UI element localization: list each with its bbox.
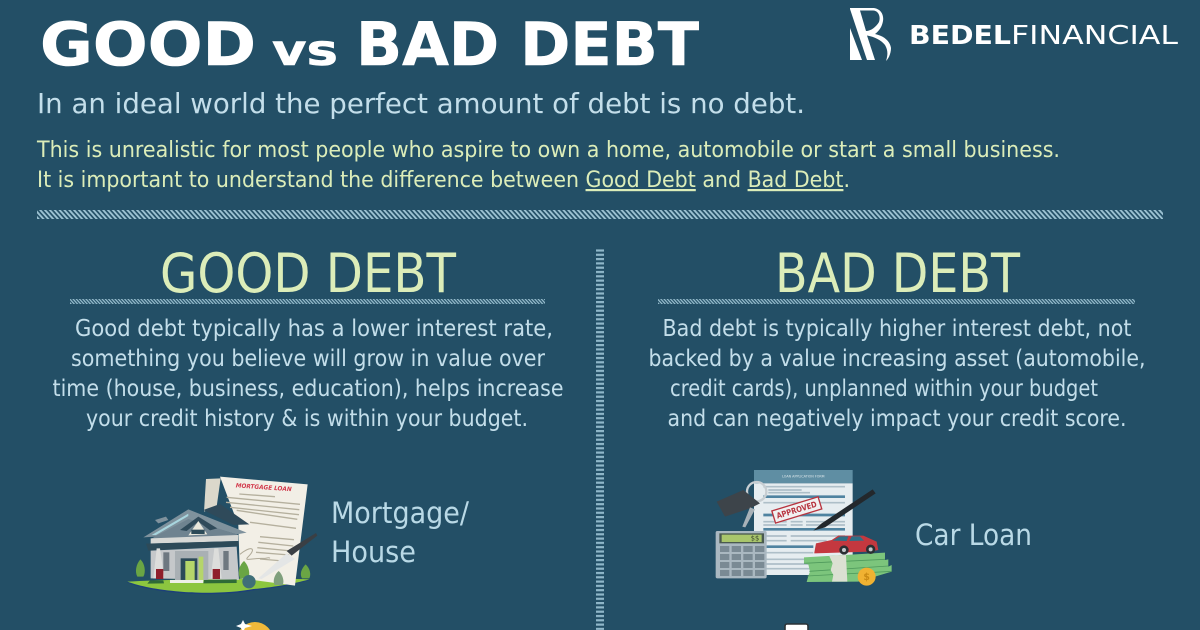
bad debt description: backed by a value increasing asset (automobile,: [648, 346, 1146, 372]
heading: bad debt: BAD DEBT: [775, 242, 1021, 305]
bad debt description: Bad debt is typically higher interest debt, not: [662, 316, 1132, 342]
icon: car loan: $$: [751, 535, 759, 543]
title: vs: [272, 26, 338, 76]
heading: good debt: GOOD DEBT: [160, 242, 457, 305]
intro text: This is unrealistic for most people who aspire to own a home, automobile or start a small business.: [36, 138, 1060, 163]
icon: car loan: LOAN APPLICATION FORM: [782, 474, 825, 478]
good debt description: [52, 316, 564, 432]
panel: good debt: [52, 242, 564, 630]
label: mortgage/house: Mortgage/: [331, 496, 469, 530]
icon: mortgage house: MORTGAGE LOAN: [236, 482, 292, 493]
subtitle: In an ideal world the perfect amount of debt is no debt.: [37, 87, 805, 120]
good debt description: time (house, business, education), helps increase: [52, 376, 564, 402]
title: [40, 10, 699, 80]
icon: car loan: [716, 470, 892, 586]
logo: Bedel Financial: [850, 8, 1179, 61]
label: mortgage/house: House: [331, 535, 416, 569]
title: GOOD: [40, 10, 256, 80]
label: car loan: Car Loan: [915, 518, 1032, 552]
icon: phone top: [785, 624, 808, 630]
icon: coin: [236, 620, 273, 630]
bad debt description: credit cards), unplanned within your budget: [670, 376, 1098, 402]
panel: bad debt: [648, 242, 1146, 630]
logo: Bedel Financial: BEDEL: [909, 21, 1011, 51]
logo: Bedel Financial: FINANCIAL: [1011, 21, 1179, 51]
bad debt description: and can negatively impact your credit score.: [668, 406, 1126, 432]
icon: car loan: $: [863, 572, 870, 583]
bad debt description: [648, 316, 1146, 432]
good debt description: something you believe will grow in value over: [71, 346, 545, 372]
intro text: It is important to understand the difference between Good Debt and Bad Debt.: [37, 168, 850, 193]
title: BAD DEBT: [356, 10, 699, 80]
good debt description: your credit history & is within your budget.: [86, 406, 528, 432]
icon: mortgage house: [127, 477, 317, 594]
label: mortgage/house: [331, 496, 469, 569]
intro text: [36, 138, 1060, 193]
good debt description: Good debt typically has a lower interest rate,: [75, 316, 553, 342]
icon: car loan: APPROVED: [775, 500, 818, 521]
